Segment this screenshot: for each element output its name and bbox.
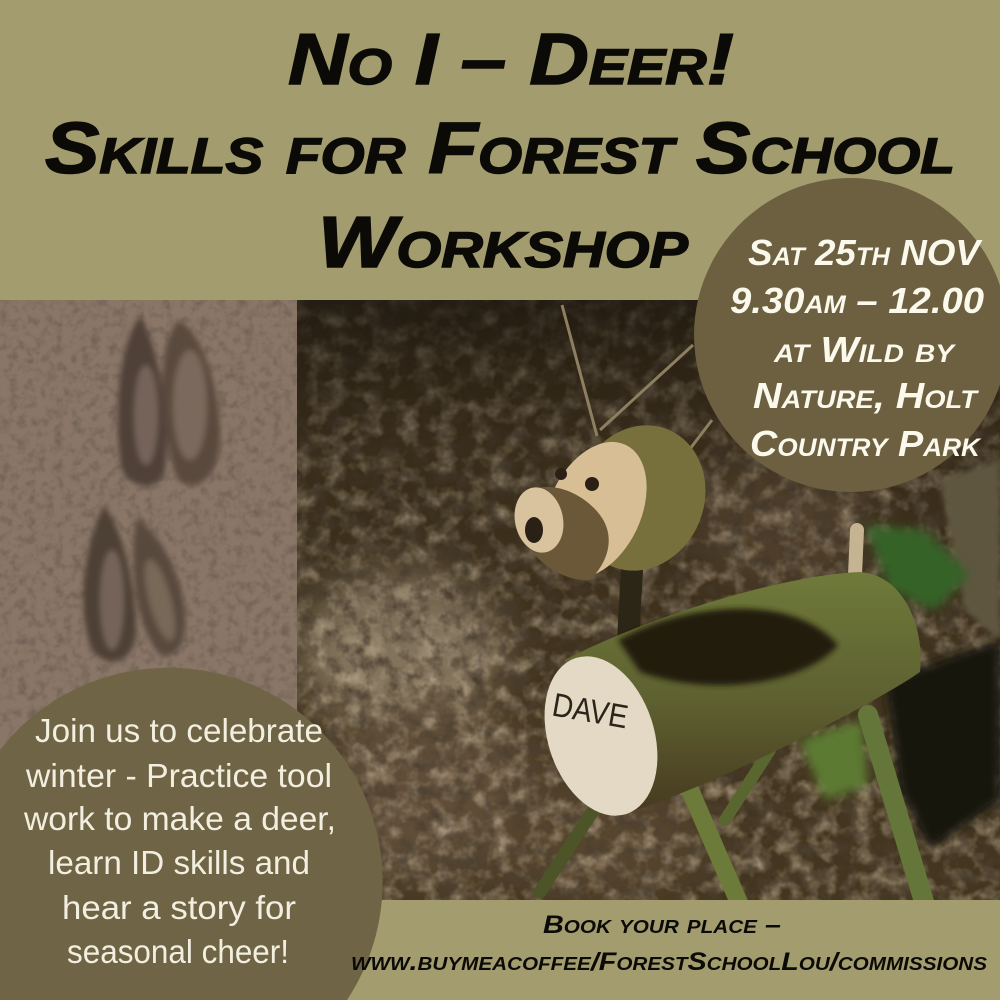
- callout: date and place: Country Park: [750, 423, 982, 464]
- title: Workshop: [318, 203, 689, 283]
- callout: date and place: 9.30am – 12.00: [730, 280, 984, 321]
- booking link: [351, 911, 987, 976]
- label: Dave: DAVE: [550, 686, 631, 735]
- title: [45, 20, 955, 283]
- booking link: Book your place –: [543, 911, 781, 939]
- title: No I – Deer!: [288, 20, 734, 100]
- callout: workshop description: [0, 668, 383, 1000]
- icon: upper hoof print: [118, 316, 220, 486]
- callout: workshop description: work to make a deer,: [23, 800, 336, 837]
- callout: date and place: [694, 178, 1000, 492]
- callout: workshop description: Join us to celebrate: [35, 712, 323, 749]
- deer body log: [544, 572, 921, 816]
- photo: wooden deer in forest: [297, 300, 1000, 905]
- booking link: www.buymeacoffee/ForestSchoolLou/commissions: [351, 948, 987, 976]
- callout: workshop description: learn ID skills and: [48, 844, 310, 881]
- icon: lower hoof print: [83, 505, 185, 661]
- callout: date and place: Nature, Holt: [753, 375, 980, 416]
- title: Skills for Forest School: [45, 109, 955, 189]
- callout: workshop description: seasonal cheer!: [67, 933, 289, 970]
- fern and trunk at right: [800, 460, 1000, 850]
- antenna twigs: [562, 305, 712, 462]
- callout: workshop description: winter - Practice tool: [25, 757, 332, 794]
- photo: deer hoof prints in mud: [0, 300, 297, 750]
- deer legs: [540, 530, 925, 905]
- callout: date and place: at Wild by: [773, 329, 957, 370]
- callout: workshop description: hear a story for: [62, 889, 296, 926]
- deer head log: [514, 425, 706, 580]
- callout: date and place: Sat 25th NOV: [748, 232, 983, 273]
